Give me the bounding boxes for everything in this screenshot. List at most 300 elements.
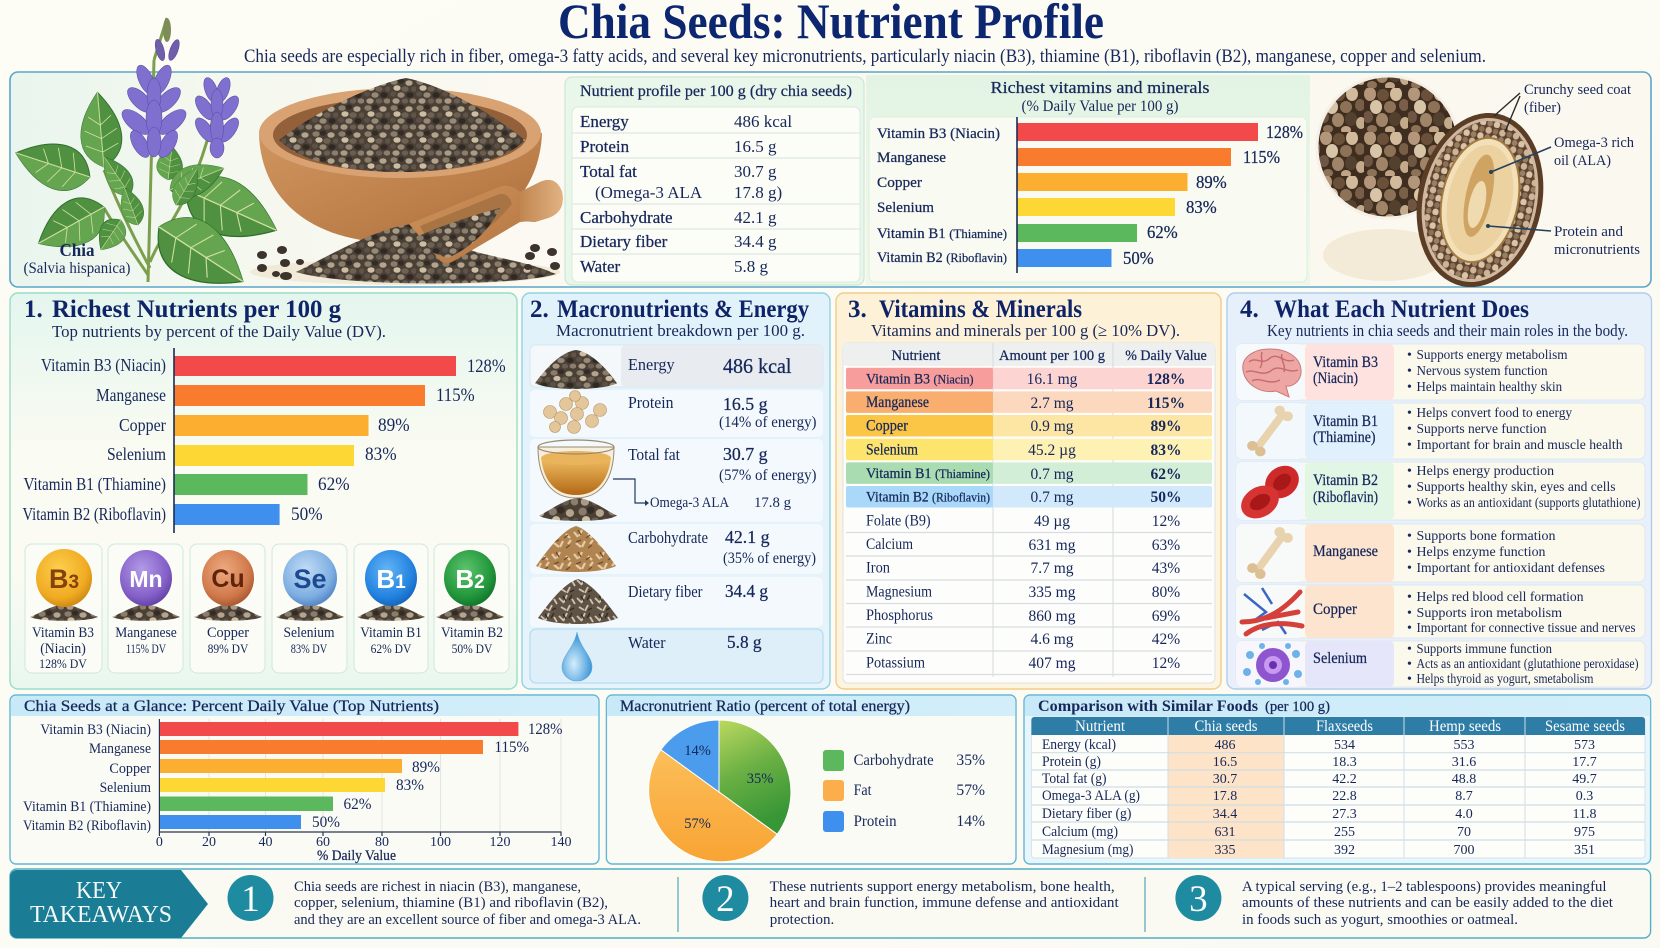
bar chart: richest vitamins and minerals: [869, 117, 1307, 282]
comparison table: 631: [1214, 825, 1236, 840]
row: carbohydrate: Carbohydrate: [628, 528, 708, 547]
heading: Macronutrients & Energy: [557, 296, 809, 323]
table: vitamins and minerals: Potassium: [866, 654, 925, 671]
takeaway 3: amounts of these nutrients and can be easily added to the diet: [1242, 895, 1614, 911]
bar chart: daily value: Vitamin B1 (Thiamine): [24, 474, 166, 494]
table: vitamins and minerals: Vitamin B1 (Thiamine): [866, 466, 990, 482]
panel: hero strip: [9, 18, 1651, 306]
table: vitamins and minerals: 80%: [1152, 584, 1180, 601]
pie legend: Carbohydrate: [854, 752, 934, 769]
nutrient table: Energy: [580, 112, 629, 131]
role row: manganese with bone icon: •: [1407, 561, 1412, 576]
callout: protein and micronutrients: [1486, 224, 1640, 258]
role row: copper with blood vessel icon: Important for connective tissue and nerves: [1416, 621, 1636, 636]
role row: vitamin B3 with brain icon: (Niacin): [1313, 370, 1358, 387]
comparison table: 31.6: [1452, 755, 1476, 770]
callout: omega-3 oil: [1489, 135, 1634, 174]
heading: What Each Nutrient Does: [1274, 296, 1529, 323]
plant label: Chia: [60, 240, 94, 260]
icon: chia plant: [9, 18, 288, 306]
comparison table: Sesame seeds: [1545, 718, 1625, 735]
nutrient table: 30.7 g: [734, 162, 777, 181]
row: protein: 16.5 g: [723, 394, 768, 414]
role row: vitamin B2 with red blood cell icon: Vitamin B2: [1313, 472, 1378, 489]
nutrient card: selenium: [272, 544, 347, 673]
comparison table: 486: [1214, 738, 1236, 753]
nutrient card: copper: Copper: [207, 625, 249, 641]
bar chart: daily value: Vitamin B3 (Niacin): [41, 355, 166, 375]
table: vitamins and minerals: 860 mg: [1029, 608, 1076, 625]
comparison table: 4.0: [1455, 807, 1473, 822]
heading: 4.: [1240, 296, 1259, 323]
bar chart: daily value: Selenium: [107, 444, 166, 464]
panel: chia seeds at a glance chart: [10, 695, 599, 864]
horizontal bar chart with axis: 89%: [412, 759, 440, 776]
bar chart: daily value: 128%: [467, 356, 506, 377]
table: vitamins and minerals: 50%: [1150, 489, 1182, 506]
panel: comparison with similar foods: [1024, 695, 1651, 864]
comparison table: 22.8: [1332, 789, 1357, 804]
nutrient table: 486 kcal: [734, 112, 792, 131]
role row: copper with blood vessel icon: Supports iron metabolism: [1416, 606, 1562, 621]
nutrient table: Total fat: [580, 162, 637, 181]
table: vitamins and minerals: 62%: [1150, 466, 1182, 483]
role row: selenium with immune cell icon: [1236, 641, 1645, 687]
role row: vitamin B3 with brain icon: Helps maintain healthy skin: [1416, 380, 1562, 395]
bar chart: richest vitamins and minerals: Vitamin B3 (Niacin): [877, 126, 1000, 142]
horizontal bar chart with axis: 20: [202, 835, 216, 850]
comparison table: Calcium (mg): [1042, 824, 1118, 840]
bar chart: richest vitamins and minerals: 115%: [1243, 147, 1280, 167]
row: total fat: 17.8 g: [754, 495, 791, 511]
table: vitamins and minerals: 2.7 mg: [1030, 395, 1074, 412]
comparison table: 18.3: [1332, 755, 1357, 770]
table: vitamins and minerals: 43%: [1152, 560, 1180, 577]
role row: vitamin B2 with red blood cell icon: •: [1407, 496, 1412, 511]
row: energy: Energy: [628, 355, 675, 374]
table: vitamins and minerals: 16.1 mg: [1027, 371, 1078, 388]
comparison table: 0.3: [1576, 789, 1593, 804]
comparison table: 8.7: [1455, 789, 1473, 804]
role row: vitamin B3 with brain icon: •: [1407, 364, 1412, 379]
table: vitamins and minerals: 42%: [1152, 631, 1180, 648]
panel 4: what each nutrient does: [1227, 293, 1652, 689]
comparison table: 48.8: [1452, 772, 1476, 787]
comparison table: 70: [1457, 825, 1471, 840]
role row: vitamin B2 with red blood cell icon: [1235, 459, 1645, 525]
row: total fat: Total fat: [628, 445, 680, 464]
subheading: Macronutrient breakdown per 100 g.: [556, 321, 805, 340]
takeaway 3: in foods such as yogurt, smoothies or oatmeal.: [1242, 912, 1518, 928]
row: total fat: 30.7 g: [723, 444, 768, 464]
table: vitamins and minerals: 12%: [1152, 513, 1180, 530]
icon: wooden bowl of chia seeds with scoop: [250, 78, 563, 285]
table: vitamins and minerals: Selenium: [866, 441, 918, 458]
nutrient card: manganese: Manganese: [115, 625, 177, 641]
horizontal bar chart with axis: Vitamin B1 (Thiamine): [23, 799, 151, 815]
comparison table: Hemp seeds: [1429, 718, 1501, 735]
comparison table: 17.7: [1572, 755, 1597, 770]
nutrient card: manganese: [108, 544, 183, 673]
table: vitamins and minerals: 4.6 mg: [1030, 631, 1074, 648]
comparison table: 27.3: [1332, 807, 1357, 822]
bar chart: daily value: Vitamin B2 (Riboflavin): [22, 504, 166, 524]
nutrient table: Carbohydrate: [580, 208, 673, 227]
role row: copper with blood vessel icon: •: [1407, 590, 1412, 605]
horizontal bar chart with axis: Vitamin B3 (Niacin): [40, 722, 151, 738]
row: carbohydrate: (35% of energy): [723, 550, 816, 567]
comparison table: Total fat (g): [1042, 771, 1107, 787]
subtitle: Chia seeds are especially rich in fiber, omega-3 fatty acids, and several key micronutrients, particularly niacin (B3), thiamine (B1), riboflavin (B2), manganese, copper and selenium.: [244, 46, 1486, 67]
role row: vitamin B3 with brain icon: Supports energy metabolism: [1416, 348, 1568, 363]
bar chart: richest vitamins and minerals: Vitamin B2 (Riboflavin): [877, 250, 1007, 266]
key takeaways arrow banner: [10, 870, 208, 938]
horizontal bar chart with axis: 120: [490, 835, 510, 850]
heading: Richest Nutrients per 100 g: [52, 296, 341, 323]
role row: vitamin B1 with bone icon: Important for brain and muscle health: [1416, 438, 1622, 453]
horizontal bar chart with axis: Vitamin B2 (Riboflavin): [23, 818, 151, 834]
table: vitamins and minerals: Folate (B9): [866, 512, 931, 529]
panel 1: richest nutrients: [10, 293, 517, 689]
role row: vitamin B2 with red blood cell icon: Supports healthy skin, eyes and cells: [1416, 480, 1616, 495]
table: vitamins and minerals: 7.7 mg: [1030, 560, 1074, 577]
icon: seed cross-section: [1401, 101, 1559, 299]
nutrient card: vitamin B3: Vitamin B3: [32, 625, 94, 641]
heading: 3.: [848, 296, 867, 323]
table: vitamins and minerals: 83%: [1150, 442, 1182, 459]
callout: seed coat: Crunchy seed coat: [1524, 82, 1632, 98]
callout: omega-3 oil: Omega-3 rich: [1554, 135, 1634, 151]
comparison table: Energy (kcal): [1042, 737, 1116, 753]
table: vitamins and minerals: 69%: [1152, 608, 1180, 625]
nutrient card: vitamin B1: 62% DV: [371, 641, 412, 656]
row: water: 5.8 g: [727, 632, 762, 652]
horizontal bar chart with axis: Selenium: [100, 780, 152, 796]
table: vitamins and minerals: Zinc: [866, 631, 892, 648]
table: vitamins and minerals: Magnesium: [866, 583, 932, 600]
bar chart: daily value: [22, 348, 506, 533]
table: vitamins and minerals: 49 µg: [1034, 513, 1070, 530]
comparison table: 255: [1334, 825, 1355, 840]
bar chart: richest vitamins and minerals: Vitamin B1 (Thiamine): [877, 226, 1007, 242]
takeaway 2: protection.: [770, 912, 834, 928]
takeaway 3: A typical serving (e.g., 1–2 tablespoons) provides meaningful: [1242, 879, 1606, 895]
comparison table: Dietary fiber (g): [1042, 806, 1132, 822]
role row: vitamin B2 with red blood cell icon: Helps energy production: [1416, 464, 1554, 479]
chart title: Chia Seeds at a Glance: Percent Daily Value (Top Nutrients): [24, 698, 439, 715]
row: carbohydrate: 42.1 g: [725, 527, 770, 547]
comparison table: 351: [1574, 843, 1595, 858]
table: vitamins and minerals: Iron: [866, 560, 890, 577]
row: total fat: (57% of energy): [719, 467, 816, 484]
comparison table: 335: [1214, 843, 1236, 858]
takeaway 1: and they are an excellent source of fiber and omega-3 ALA.: [294, 912, 641, 928]
bar chart: richest vitamins and minerals: 89%: [1196, 172, 1227, 192]
table: vitamins and minerals: % Daily Value: [1125, 348, 1207, 364]
row: energy: 486 kcal: [723, 354, 792, 378]
chart title: Macronutrient Ratio (percent of total energy): [620, 698, 910, 715]
takeaway 2: heart and brain function, immune defense and antioxidant: [770, 895, 1120, 911]
panel heading: (per 100 g): [1265, 699, 1330, 715]
table: vitamins and minerals: 335 mg: [1029, 584, 1076, 601]
pie legend: 14%: [956, 813, 985, 830]
panel heading: Nutrient profile per 100 g (dry chia seeds): [580, 83, 852, 100]
nutrient card: vitamin B2: B2: [455, 564, 485, 594]
row: protein: Protein: [628, 393, 674, 412]
nutrient table: 42.1 g: [734, 208, 777, 227]
bar chart: richest vitamins and minerals: Manganese: [877, 150, 946, 166]
subheading: Top nutrients by percent of the Daily Value (DV).: [52, 322, 386, 341]
nutrient table: 34.4 g: [734, 232, 777, 251]
role row: vitamin B3 with brain icon: •: [1407, 348, 1412, 363]
plant label: [24, 240, 130, 277]
role row: selenium with immune cell icon: •: [1407, 672, 1412, 687]
role row: manganese with bone icon: •: [1407, 529, 1412, 544]
table: vitamins and minerals: Vitamin B3 (Niacin): [866, 371, 974, 387]
horizontal bar chart with axis: Copper: [109, 761, 151, 777]
key takeaways arrow banner: TAKEAWAYS: [30, 902, 172, 928]
panel 3: vitamins and minerals: [836, 293, 1221, 689]
horizontal bar chart with axis: 115%: [494, 739, 529, 756]
nutrient table: 17.8 g): [734, 183, 782, 202]
takeaway 3: [1175, 875, 1614, 928]
horizontal bar chart with axis: 60: [316, 835, 330, 850]
nutrient card: copper: 89% DV: [208, 641, 249, 656]
nutrient card: vitamin B2: Vitamin B2: [441, 625, 503, 641]
nutrient card: selenium: 83% DV: [291, 641, 328, 656]
role row: vitamin B1 with bone icon: •: [1407, 406, 1412, 421]
role row: vitamin B3 with brain icon: [1236, 344, 1645, 400]
nutrient card: vitamin B1: Vitamin B1: [360, 625, 422, 641]
nutrient card: vitamin B3: [25, 544, 102, 673]
bar chart: daily value: 89%: [378, 415, 410, 436]
role row: vitamin B1 with bone icon: •: [1407, 438, 1412, 453]
takeaway 2: These nutrients support energy metabolism, bone health,: [770, 879, 1115, 895]
heading: 1.: [24, 296, 43, 323]
bar chart: daily value: 115%: [436, 385, 475, 406]
nutrient card: vitamin B2: 50% DV: [452, 641, 493, 656]
role row: vitamin B1 with bone icon: Vitamin B1: [1313, 413, 1378, 430]
row: water: [530, 629, 823, 683]
callout: seed coat: [1494, 82, 1632, 132]
table: vitamins and minerals: 128%: [1147, 371, 1185, 388]
role row: manganese with bone icon: Manganese: [1313, 543, 1378, 560]
row: protein: (14% of energy): [719, 414, 816, 431]
takeaway 1: [228, 875, 641, 928]
comparison table: 700: [1454, 843, 1474, 858]
horizontal bar chart with axis: % Daily Value: [317, 848, 396, 864]
comparison table: 17.8: [1213, 789, 1237, 804]
role row: vitamin B2 with red blood cell icon: •: [1407, 464, 1412, 479]
nutrient card: vitamin B3: B3: [49, 564, 79, 594]
panel: nutrient profile per 100 g: [565, 77, 864, 285]
role row: vitamin B1 with bone icon: (Thiamine): [1313, 429, 1376, 446]
role row: vitamin B1 with bone icon: Helps convert food to energy: [1416, 406, 1572, 421]
comparison table: 16.5: [1213, 755, 1237, 770]
comparison table: 553: [1454, 738, 1474, 753]
chart title: [990, 78, 1210, 115]
comparison table: 49.7: [1572, 772, 1597, 787]
subheading: Vitamins and minerals per 100 g (≥ 10% DV).: [871, 321, 1180, 340]
horizontal bar chart with axis: [23, 719, 572, 864]
bar chart: richest vitamins and minerals: 62%: [1147, 222, 1178, 242]
table: vitamins and minerals: 631 mg: [1029, 537, 1076, 554]
role row: copper with blood vessel icon: Helps red blood cell formation: [1416, 590, 1584, 605]
comparison table: Nutrient: [1075, 718, 1126, 735]
role row: manganese with bone icon: [1236, 524, 1645, 582]
comparison table: 34.4: [1213, 807, 1237, 822]
takeaway 1: Chia seeds are richest in niacin (B3), manganese,: [294, 879, 581, 895]
heading: 2.: [530, 296, 549, 323]
pie chart: 14%: [684, 743, 711, 759]
nutrient table: 5.8 g: [734, 257, 768, 276]
role row: manganese with bone icon: •: [1407, 545, 1412, 560]
nutrient table: [572, 107, 860, 282]
nutrient table: Protein: [580, 137, 630, 156]
horizontal bar chart with axis: 100: [430, 835, 451, 850]
table: vitamins and minerals: 12%: [1152, 655, 1180, 672]
role row: copper with blood vessel icon: •: [1407, 606, 1412, 621]
takeaway 2: [702, 875, 1120, 928]
horizontal bar chart with axis: 40: [258, 835, 272, 850]
bar chart: richest vitamins and minerals: Copper: [877, 175, 922, 191]
bar chart: daily value: 50%: [291, 504, 323, 525]
bar chart: richest vitamins and minerals: 50%: [1123, 248, 1154, 268]
bar chart: daily value: Manganese: [96, 385, 166, 405]
table: vitamins and minerals: Manganese: [866, 394, 929, 411]
row: carbohydrate: [530, 524, 823, 574]
bar chart: richest vitamins and minerals: 83%: [1186, 197, 1217, 217]
nutrient card: vitamin B1: B1: [376, 564, 406, 594]
takeaway 3: 3: [1189, 879, 1208, 920]
comparison table: 573: [1574, 738, 1595, 753]
pie chart: 35%: [747, 771, 773, 787]
nutrient card: manganese: Mn: [129, 566, 163, 592]
comparison table: Flaxseeds: [1316, 718, 1373, 735]
callout: protein and micronutrients: Protein and: [1554, 224, 1623, 240]
key takeaways arrow banner: KEY: [76, 878, 122, 904]
nutrient card: selenium: Se: [293, 564, 327, 594]
callout: seed coat: (fiber): [1524, 100, 1561, 116]
nutrient card: vitamin B3: 128% DV: [39, 656, 87, 671]
role row: copper with blood vessel icon: •: [1407, 621, 1412, 636]
role row: copper with blood vessel icon: [1236, 585, 1645, 638]
takeaway 1: 1: [241, 879, 260, 920]
role row: vitamin B2 with red blood cell icon: •: [1407, 480, 1412, 495]
plant label: (Salvia hispanica): [24, 260, 130, 277]
row: total fat: [530, 439, 823, 522]
comparison table: 11.8: [1573, 807, 1596, 822]
table: vitamins and minerals: 407 mg: [1029, 655, 1076, 672]
table: vitamins and minerals: Amount per 100 g: [999, 348, 1105, 364]
role row: vitamin B2 with red blood cell icon: (Riboflavin): [1313, 489, 1378, 506]
comparison table: Chia seeds: [1194, 718, 1258, 735]
row: dietary fiber: [530, 577, 823, 627]
comparison table: 392: [1334, 843, 1355, 858]
row: water: Water: [628, 633, 666, 652]
row: energy: [530, 345, 823, 389]
panel: macronutrient ratio: [606, 695, 1016, 864]
bar chart: richest vitamins and minerals: 128%: [1266, 122, 1303, 142]
comparison table: 975: [1574, 825, 1595, 840]
bar chart: daily value: 83%: [365, 444, 397, 465]
nutrient card: selenium: Selenium: [284, 625, 335, 641]
role row: vitamin B3 with brain icon: Vitamin B3: [1313, 354, 1378, 371]
role row: manganese with bone icon: Supports bone formation: [1416, 529, 1556, 544]
row: dietary fiber: Dietary fiber: [628, 582, 703, 601]
table: vitamins and minerals: 63%: [1152, 537, 1180, 554]
role row: vitamin B1 with bone icon: Supports nerve function: [1416, 422, 1546, 437]
nutrient card: vitamin B2: [434, 544, 509, 673]
panel: richest vitamins and minerals: [866, 75, 1310, 285]
role row: selenium with immune cell icon: •: [1407, 642, 1412, 657]
role row: selenium with immune cell icon: •: [1407, 657, 1412, 672]
role row: selenium with immune cell icon: Helps thyroid as yogurt, smetabolism: [1416, 671, 1594, 686]
horizontal bar chart with axis: 0: [156, 835, 163, 850]
panel: key takeaways: [10, 869, 1651, 938]
pie chart: [649, 720, 791, 862]
nutrient card: manganese: 115% DV: [126, 641, 166, 656]
bar chart: daily value: Copper: [119, 415, 166, 435]
role row: manganese with bone icon: Important for antioxidant defenses: [1416, 561, 1605, 576]
horizontal bar chart with axis: 50%: [312, 814, 340, 831]
comparison table: 42.2: [1332, 772, 1357, 787]
pie legend: Fat: [854, 782, 872, 799]
role row: vitamin B3 with brain icon: •: [1407, 380, 1412, 395]
table: vitamins and minerals: Nutrient: [892, 348, 941, 364]
icon: seed close-up circle: [1317, 76, 1459, 281]
table: vitamins and minerals: 0.9 mg: [1030, 418, 1074, 435]
nutrient table: 16.5 g: [734, 137, 777, 156]
table: vitamins and minerals: 115%: [1147, 395, 1185, 412]
table: vitamins and minerals: 45.2 µg: [1028, 442, 1076, 459]
row: protein: [530, 390, 823, 437]
pie legend: Protein: [854, 813, 897, 830]
pie legend: [823, 750, 985, 832]
table: vitamins and minerals: Vitamin B2 (Riboflavin): [866, 490, 990, 506]
table: vitamins and minerals: [843, 343, 1215, 683]
comparison table: Magnesium (mg): [1042, 842, 1134, 858]
takeaway 1: copper, selenium, thiamine (B1) and riboflavin (B2),: [294, 895, 608, 911]
comparison table: 30.7: [1213, 772, 1237, 787]
pie chart: 57%: [684, 816, 711, 832]
role row: vitamin B1 with bone icon: •: [1407, 422, 1412, 437]
table: vitamins and minerals: Copper: [866, 418, 909, 435]
horizontal bar chart with axis: 128%: [528, 721, 563, 738]
nutrient card: copper: Cu: [211, 565, 245, 593]
bar chart: daily value: 62%: [318, 474, 350, 495]
row: dietary fiber: 34.4 g: [725, 581, 768, 601]
nutrient table: (Omega-3 ALA: [595, 183, 703, 202]
pie legend: 35%: [956, 752, 985, 769]
table: vitamins and minerals: 89%: [1150, 418, 1182, 435]
horizontal bar chart with axis: 140: [550, 835, 572, 850]
takeaway 2: 2: [716, 879, 735, 920]
row: total fat: Omega-3 ALA: [650, 495, 729, 511]
comparison table: 534: [1334, 738, 1355, 753]
nutrient table: Water: [580, 257, 620, 276]
chart title: Richest vitamins and minerals: [990, 78, 1210, 97]
comparison table: Protein (g): [1042, 754, 1101, 770]
horizontal bar chart with axis: Manganese: [89, 741, 151, 757]
table: vitamins and minerals: Phosphorus: [866, 607, 933, 624]
role row: copper with blood vessel icon: Copper: [1313, 601, 1358, 618]
bar chart: richest vitamins and minerals: Selenium: [877, 200, 934, 216]
table: vitamins and minerals: Calcium: [866, 536, 913, 553]
heading: Vitamins & Minerals: [879, 296, 1082, 323]
horizontal bar chart with axis: 80: [375, 835, 389, 850]
nutrient table: Dietary fiber: [580, 232, 668, 251]
